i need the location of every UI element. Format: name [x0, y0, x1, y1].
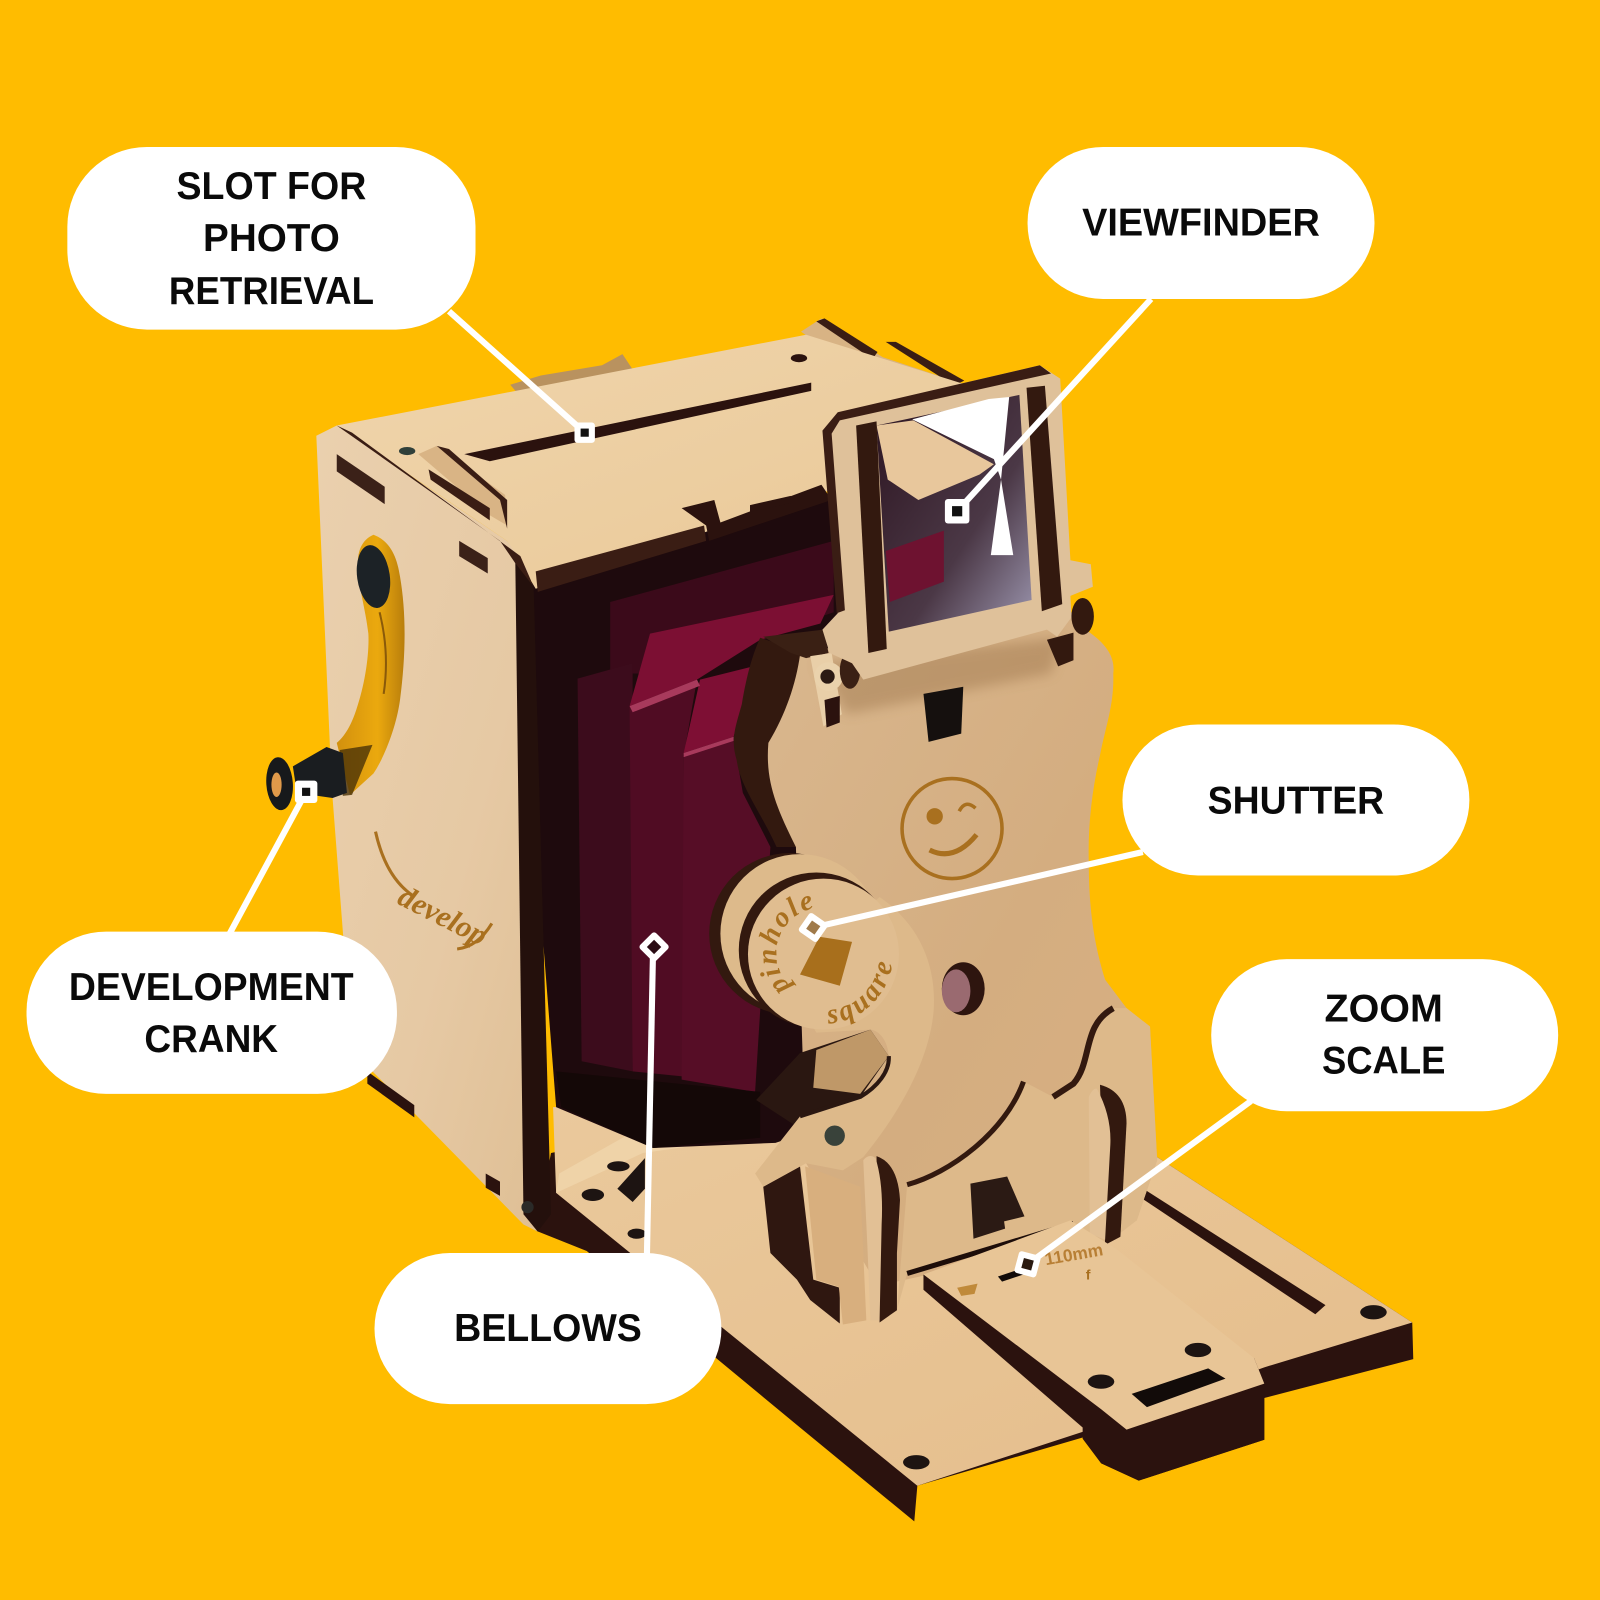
engraved word: develop — [376, 832, 493, 953]
leader line: crank — [230, 792, 306, 934]
disc engraving: pinhole — [758, 896, 812, 994]
label: slot for photo retrieval: PHOTO — [203, 217, 340, 260]
soft shadow — [816, 638, 1061, 714]
leader line: zoom — [1028, 1101, 1251, 1264]
marker: zoom — [1014, 1251, 1041, 1278]
development crank — [265, 535, 405, 811]
label: development crank — [27, 932, 397, 1094]
marker: viewfinder — [945, 499, 969, 523]
shutter disc and arm — [709, 853, 934, 1187]
marker: crank — [295, 781, 317, 803]
label: slot for photo retrieval — [67, 147, 476, 330]
leader line: slot — [449, 311, 585, 433]
lower bracket — [763, 1008, 1157, 1324]
label: development crank: CRANK — [144, 1018, 278, 1061]
top panel — [337, 318, 969, 592]
label: shutter: SHUTTER — [1208, 779, 1384, 822]
shutter disc and arm: square — [828, 962, 892, 1024]
engraved word: develop: develop — [393, 879, 493, 953]
label: development crank: DEVELOPMENT — [69, 966, 354, 1009]
leader line: viewfinder — [957, 299, 1151, 511]
label: zoom scale: SCALE — [1322, 1039, 1445, 1082]
label: slot for photo retrieval: SLOT FOR — [177, 165, 366, 208]
lens hole — [942, 962, 985, 1015]
viewfinder glass — [877, 395, 1032, 632]
marker: shutter — [798, 912, 829, 943]
zoom scale plate: f — [1086, 1268, 1091, 1284]
zoom scale plate — [923, 1220, 1264, 1481]
front standard — [734, 612, 1157, 1324]
base board — [536, 1102, 1413, 1521]
label: slot for photo retrieval: RETRIEVAL — [169, 270, 374, 313]
label: bellows: BELLOWS — [454, 1307, 642, 1350]
leader line: shutter — [813, 852, 1143, 928]
bellows interior — [515, 490, 847, 1148]
shutter slot — [923, 687, 963, 742]
scale text: 110mm — [1043, 1239, 1105, 1269]
label: viewfinder — [1028, 147, 1374, 299]
viewfinder — [763, 365, 1094, 728]
marker: bellows — [638, 931, 670, 963]
marker: slot — [574, 422, 595, 443]
label: zoom scale — [1211, 959, 1558, 1111]
smiley engraving — [902, 779, 1002, 879]
camera illustration — [266, 318, 1414, 1522]
leader line: bellows — [647, 949, 653, 1255]
label: zoom scale: ZOOM — [1324, 987, 1443, 1030]
label: shutter — [1122, 724, 1469, 876]
label: viewfinder: VIEWFINDER — [1082, 202, 1320, 245]
side panel — [316, 426, 551, 1232]
label: bellows — [374, 1253, 721, 1404]
shutter square — [800, 937, 852, 986]
